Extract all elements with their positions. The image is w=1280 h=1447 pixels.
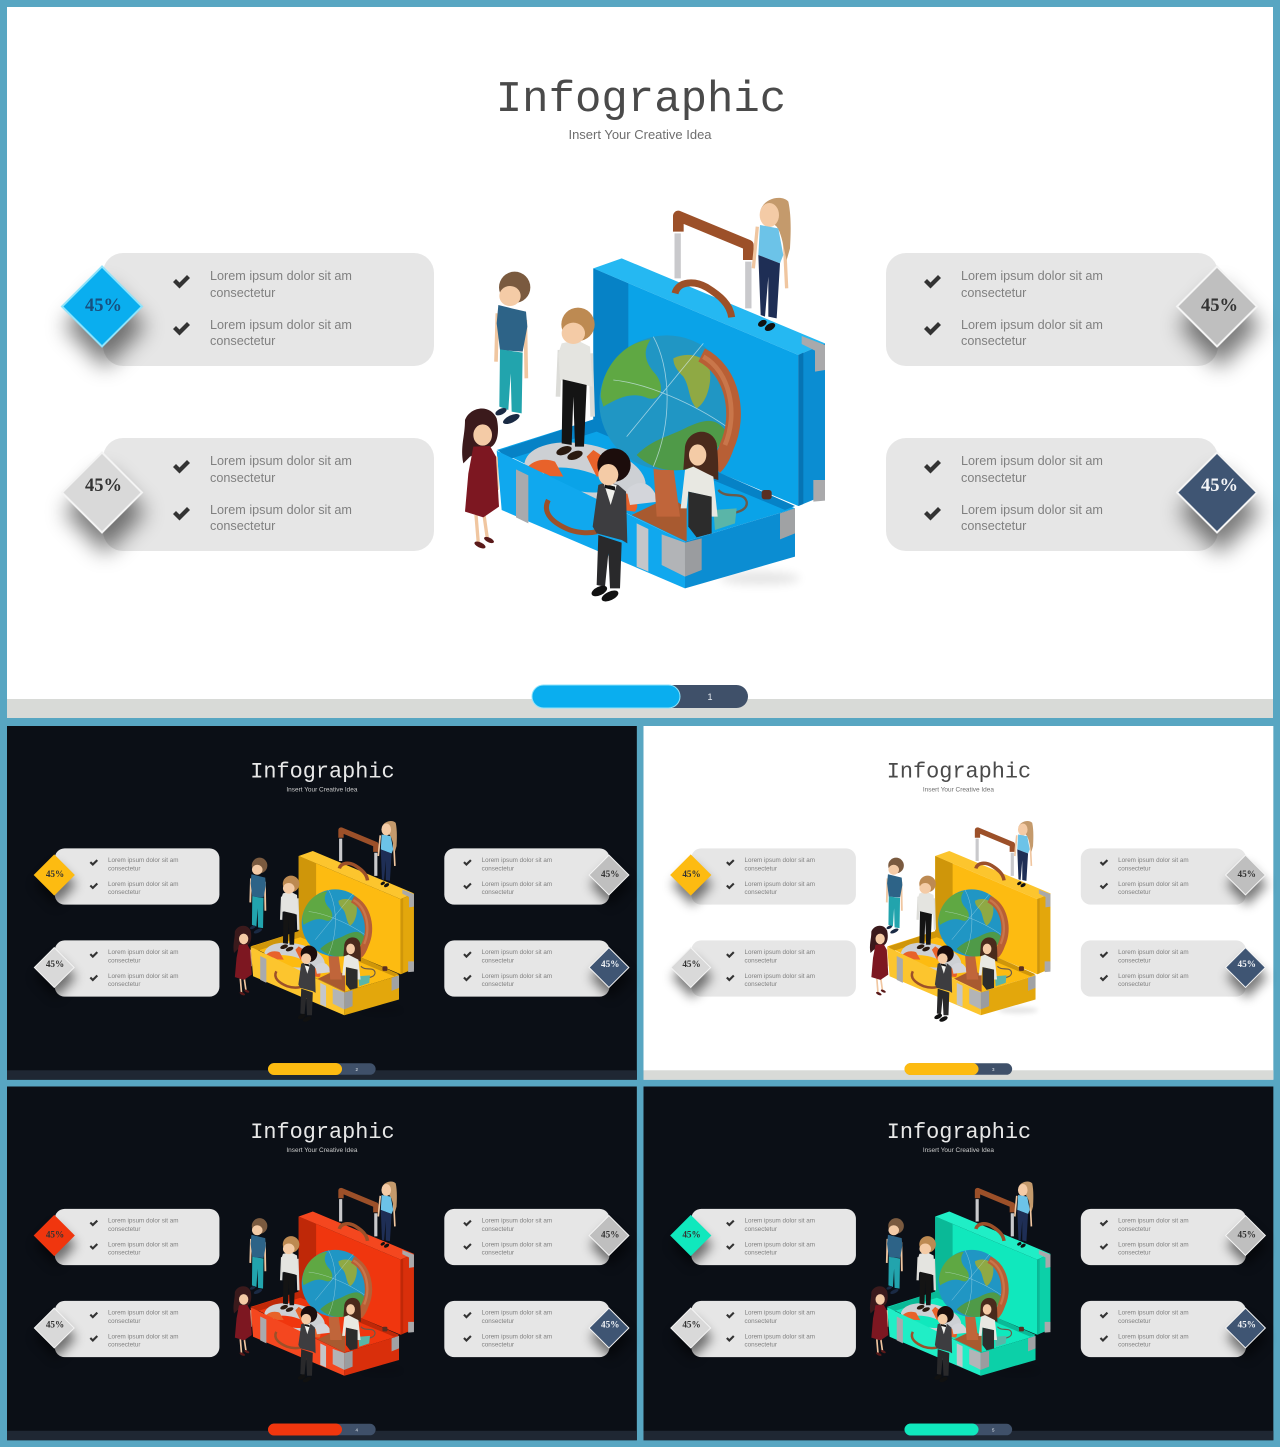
panel text and percentages: consectetur bbox=[108, 1250, 140, 1257]
slide background bbox=[7, 1086, 637, 1440]
panel text and percentages: Lorem ipsum dolor sit am bbox=[961, 269, 1103, 283]
panel text and percentages: Lorem ipsum dolor sit am bbox=[108, 1217, 179, 1224]
panel text and percentages: Lorem ipsum dolor sit am bbox=[1118, 973, 1189, 980]
panel text and percentages: Lorem ipsum dolor sit am bbox=[482, 857, 552, 864]
footer band bbox=[7, 1431, 637, 1440]
slide 5: teal dark slide bbox=[644, 1086, 1273, 1440]
footer band bbox=[7, 699, 1273, 718]
panel text and percentages: consectetur bbox=[1118, 1342, 1151, 1349]
panel: top right bbox=[886, 253, 1261, 368]
panel text and percentages: 45% bbox=[601, 1319, 619, 1329]
info panels bbox=[671, 1209, 1267, 1359]
page pill bbox=[268, 1424, 376, 1435]
panel text and percentages bbox=[46, 857, 619, 988]
panel text and percentages: Lorem ipsum dolor sit am bbox=[210, 318, 352, 332]
page pill bbox=[905, 1063, 1012, 1075]
page pill bbox=[532, 685, 748, 708]
panel text and percentages: consectetur bbox=[482, 957, 514, 964]
panel text and percentages: consectetur bbox=[1118, 889, 1151, 896]
footer band bbox=[644, 1431, 1273, 1440]
panel: bottom right bbox=[886, 438, 1261, 554]
panel text and percentages: Lorem ipsum dolor sit am bbox=[482, 1242, 552, 1249]
panel text and percentages: Lorem ipsum dolor sit am bbox=[1118, 1309, 1189, 1316]
panel text and percentages bbox=[682, 1217, 1256, 1349]
panel text and percentages: Lorem ipsum dolor sit am bbox=[961, 503, 1103, 517]
info panels bbox=[34, 1209, 631, 1359]
panel text and percentages: consectetur bbox=[1118, 981, 1151, 988]
panel: top left bbox=[62, 253, 434, 368]
suitcase lid bbox=[593, 258, 825, 506]
page pill bbox=[268, 1063, 376, 1075]
slide background bbox=[644, 1086, 1273, 1440]
panel text and percentages: consectetur bbox=[482, 1318, 514, 1325]
panel text and percentages: Lorem ipsum dolor sit am bbox=[744, 1242, 815, 1249]
page number: 1 bbox=[707, 692, 713, 702]
panel text and percentages: consectetur bbox=[744, 1250, 777, 1257]
panel text and percentages: consectetur bbox=[108, 889, 140, 896]
panel text and percentages bbox=[85, 269, 1238, 533]
slide background bbox=[7, 7, 1273, 718]
title: Infographic bbox=[496, 75, 786, 125]
telescopic handle bbox=[678, 216, 748, 308]
panel text and percentages: Lorem ipsum dolor sit am bbox=[108, 1334, 179, 1341]
illustration: yellow suitcase bbox=[870, 821, 1050, 1023]
panel text and percentages: consectetur bbox=[961, 286, 1026, 300]
panel text and percentages: Lorem ipsum dolor sit am bbox=[210, 503, 352, 517]
info panels with diamonds and checks bbox=[62, 253, 1261, 554]
panel text and percentages: consectetur bbox=[961, 519, 1026, 533]
panel text and percentages: consectetur bbox=[482, 865, 514, 872]
panel text and percentages: Lorem ipsum dolor sit am bbox=[1118, 1217, 1189, 1224]
person: woman in red dress bbox=[462, 408, 499, 550]
panel text and percentages: Lorem ipsum dolor sit am bbox=[482, 1217, 552, 1224]
panel text and percentages: consectetur bbox=[482, 1342, 514, 1349]
panel text and percentages: consectetur bbox=[210, 471, 275, 485]
person: woman on lid bbox=[753, 198, 791, 333]
panel text and percentages: consectetur bbox=[108, 1226, 140, 1233]
page number: 2 bbox=[355, 1067, 358, 1072]
panel text and percentages: consectetur bbox=[744, 865, 777, 872]
panel text and percentages: Lorem ipsum dolor sit am bbox=[1118, 949, 1189, 956]
table and items bbox=[627, 483, 772, 542]
panel text and percentages: 45% bbox=[46, 1319, 64, 1329]
panel text and percentages: consectetur bbox=[961, 471, 1026, 485]
panel text and percentages: consectetur bbox=[210, 286, 275, 300]
panel text and percentages: 45% bbox=[46, 869, 64, 879]
person: seated woman bbox=[681, 432, 718, 537]
panel text and percentages: 45% bbox=[1238, 1230, 1256, 1240]
panel text and percentages: Lorem ipsum dolor sit am bbox=[1118, 1242, 1189, 1249]
panel text and percentages: Lorem ipsum dolor sit am bbox=[210, 269, 352, 283]
person: boy in blue shirt bbox=[494, 272, 530, 426]
panel text and percentages: consectetur bbox=[108, 957, 140, 964]
panel text and percentages: 45% bbox=[682, 869, 701, 879]
panel text and percentages: 45% bbox=[1201, 476, 1238, 496]
footer band bbox=[7, 1070, 637, 1080]
page number: 3 bbox=[992, 1067, 995, 1072]
illustration: yellow suitcase bbox=[233, 821, 414, 1023]
panel text and percentages: consectetur bbox=[108, 1318, 140, 1325]
panel text and percentages: Lorem ipsum dolor sit am bbox=[744, 973, 815, 980]
panel text and percentages: Lorem ipsum dolor sit am bbox=[108, 881, 179, 888]
person: man in black suit bbox=[590, 448, 631, 604]
panel text and percentages: consectetur bbox=[744, 1318, 777, 1325]
panel text and percentages: 45% bbox=[1201, 296, 1238, 316]
panel text and percentages: Lorem ipsum dolor sit am bbox=[482, 881, 552, 888]
panel text and percentages: Lorem ipsum dolor sit am bbox=[210, 454, 352, 468]
slide 4: red dark slide bbox=[7, 1086, 637, 1440]
panel text and percentages: Lorem ipsum dolor sit am bbox=[1118, 857, 1189, 864]
globe bbox=[599, 335, 734, 517]
subtitle: Insert Your Creative Idea bbox=[568, 127, 712, 142]
panel text and percentages: consectetur bbox=[108, 1342, 140, 1349]
title: Infographic bbox=[250, 1120, 395, 1145]
illustration: red suitcase bbox=[233, 1181, 414, 1383]
panel text and percentages: Lorem ipsum dolor sit am bbox=[744, 1217, 815, 1224]
panel text and percentages: consectetur bbox=[744, 1342, 777, 1349]
panel text and percentages: consectetur bbox=[744, 981, 777, 988]
panel text and percentages: consectetur bbox=[108, 981, 140, 988]
slide 3: yellow light slide bbox=[644, 726, 1273, 1080]
ground shadow bbox=[720, 572, 800, 585]
panel text and percentages: Lorem ipsum dolor sit am bbox=[108, 973, 179, 980]
person: blond boy in white shirt bbox=[555, 308, 595, 462]
panel text and percentages: Lorem ipsum dolor sit am bbox=[482, 973, 552, 980]
panel text and percentages: consectetur bbox=[482, 889, 514, 896]
panel text and percentages: consectetur bbox=[1118, 957, 1151, 964]
panel text and percentages: 45% bbox=[46, 1230, 64, 1240]
slide background bbox=[7, 726, 637, 1080]
page number: 5 bbox=[992, 1427, 995, 1432]
panel text and percentages: Lorem ipsum dolor sit am bbox=[1118, 1334, 1189, 1341]
panel text and percentages: Lorem ipsum dolor sit am bbox=[961, 454, 1103, 468]
subtitle: Insert Your Creative Idea bbox=[286, 1147, 358, 1154]
panel text and percentages: Lorem ipsum dolor sit am bbox=[961, 318, 1103, 332]
panel text and percentages: consectetur bbox=[1118, 1318, 1151, 1325]
panel text and percentages: Lorem ipsum dolor sit am bbox=[482, 1334, 552, 1341]
page number: 4 bbox=[355, 1427, 358, 1432]
panel text and percentages: 45% bbox=[85, 476, 122, 496]
page pill bbox=[905, 1424, 1012, 1435]
panel text and percentages: consectetur bbox=[210, 334, 275, 348]
title: Infographic bbox=[887, 760, 1031, 785]
panel text and percentages: consectetur bbox=[210, 519, 275, 533]
panel text and percentages: Lorem ipsum dolor sit am bbox=[108, 857, 179, 864]
suitcase base front faces bbox=[497, 451, 795, 588]
panel text and percentages: Lorem ipsum dolor sit am bbox=[108, 949, 179, 956]
lid carry handle bbox=[675, 283, 732, 317]
panel text and percentages: consectetur bbox=[1118, 1250, 1151, 1257]
panel text and percentages bbox=[682, 857, 1256, 988]
panel text and percentages: consectetur bbox=[108, 865, 140, 872]
subtitle: Insert Your Creative Idea bbox=[923, 1147, 994, 1154]
panel text and percentages: consectetur bbox=[1118, 1226, 1151, 1233]
panel text and percentages: Lorem ipsum dolor sit am bbox=[744, 857, 815, 864]
panel text and percentages: 45% bbox=[601, 869, 619, 879]
panel text and percentages: consectetur bbox=[482, 1250, 514, 1257]
info panels bbox=[671, 848, 1267, 998]
panel text and percentages: Lorem ipsum dolor sit am bbox=[108, 1242, 179, 1249]
panel text and percentages: 45% bbox=[1238, 869, 1256, 879]
panel text and percentages: Lorem ipsum dolor sit am bbox=[744, 949, 815, 956]
panel text and percentages bbox=[46, 1217, 619, 1349]
panel text and percentages: consectetur bbox=[482, 1226, 514, 1233]
slide 1: large blue light slide bbox=[7, 7, 1273, 718]
panel text and percentages: consectetur bbox=[482, 981, 514, 988]
panel text and percentages: Lorem ipsum dolor sit am bbox=[482, 1309, 552, 1316]
panel text and percentages: Lorem ipsum dolor sit am bbox=[1118, 881, 1189, 888]
panel text and percentages: 45% bbox=[682, 959, 701, 969]
illustration: suitcase, globe and people bbox=[462, 198, 825, 604]
panel text and percentages: 45% bbox=[1238, 959, 1256, 969]
panel text and percentages: consectetur bbox=[1118, 865, 1151, 872]
subtitle: Insert Your Creative Idea bbox=[286, 787, 358, 794]
panel text and percentages: Lorem ipsum dolor sit am bbox=[482, 949, 552, 956]
panel text and percentages: 45% bbox=[46, 959, 64, 969]
slide 2: yellow dark slide bbox=[7, 726, 637, 1080]
panel text and percentages: 45% bbox=[601, 959, 619, 969]
panel text and percentages: Lorem ipsum dolor sit am bbox=[108, 1309, 179, 1316]
panel text and percentages: consectetur bbox=[744, 1226, 777, 1233]
title: Infographic bbox=[887, 1120, 1031, 1145]
panel text and percentages: 45% bbox=[682, 1230, 701, 1240]
panel text and percentages: 45% bbox=[85, 296, 122, 316]
info panels bbox=[34, 848, 631, 998]
footer band bbox=[644, 1070, 1273, 1080]
panel text and percentages: Lorem ipsum dolor sit am bbox=[744, 881, 815, 888]
panel text and percentages: Lorem ipsum dolor sit am bbox=[744, 1334, 815, 1341]
slide background bbox=[644, 726, 1273, 1080]
panel: bottom left bbox=[62, 438, 434, 554]
panel text and percentages: consectetur bbox=[744, 889, 777, 896]
panel text and percentages: 45% bbox=[601, 1230, 619, 1240]
panel text and percentages: 45% bbox=[682, 1319, 701, 1329]
subtitle: Insert Your Creative Idea bbox=[923, 787, 994, 794]
panel text and percentages: Lorem ipsum dolor sit am bbox=[744, 1309, 815, 1316]
title: Infographic bbox=[250, 760, 395, 785]
illustration: teal suitcase bbox=[870, 1181, 1050, 1383]
life ring bbox=[518, 432, 652, 518]
suitcase base interior bbox=[497, 418, 795, 542]
panel text and percentages: 45% bbox=[1238, 1319, 1256, 1329]
panel text and percentages: consectetur bbox=[961, 334, 1026, 348]
panel text and percentages: consectetur bbox=[744, 957, 777, 964]
